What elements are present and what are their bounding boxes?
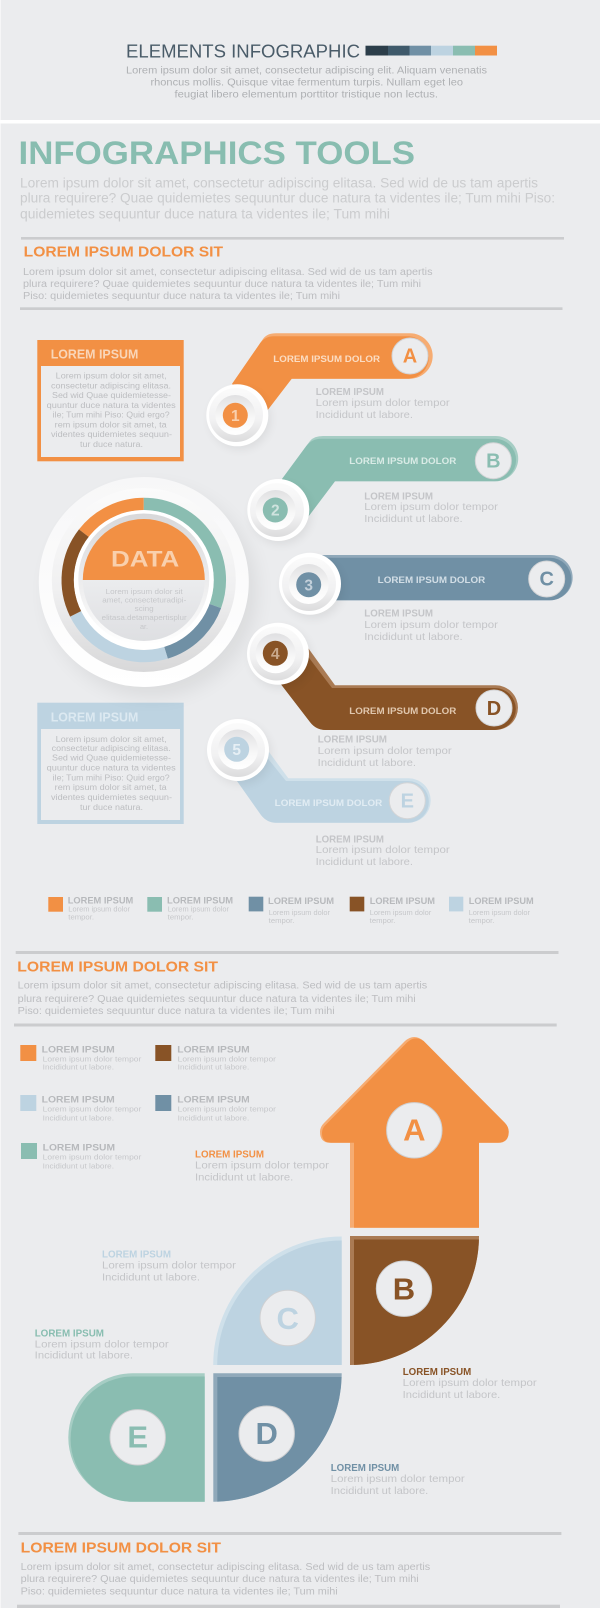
knob 5: 5 xyxy=(232,742,241,759)
callout B text: Lorem ipsum dolor tempor xyxy=(403,1377,537,1389)
blue box text: Sed wid Quae quidemietesse- xyxy=(52,754,171,763)
legend grid item light blue: Incididunt ut labore. xyxy=(43,1113,114,1122)
donut segments xyxy=(68,504,220,656)
legend grid item teal xyxy=(21,1143,142,1170)
callout A text: Lorem ipsum dolor tempor xyxy=(195,1160,330,1172)
section 2 heading block xyxy=(14,951,558,1026)
legend item light blue: Lorem ipsum dolor xyxy=(469,908,530,917)
knob 2 xyxy=(247,479,311,544)
description B xyxy=(364,490,499,525)
legend grid item orange: LOREM IPSUM xyxy=(42,1045,115,1056)
main intro paragraph: Lorem ipsum dolor sit amet, consectetur adipiscing elitasa. Sed wid de us tam apertis xyxy=(20,176,538,191)
badge D xyxy=(476,690,512,726)
description C: Incididunt ut labore. xyxy=(364,631,463,643)
description D: Lorem ipsum dolor tempor xyxy=(318,745,452,757)
callout B text: Incididunt ut labore. xyxy=(403,1389,500,1401)
legend grid item orange: Lorem ipsum dolor tempor xyxy=(43,1055,142,1064)
header title: ELEMENTS INFOGRAPHIC xyxy=(126,40,360,61)
knob 1: 1 xyxy=(231,408,240,425)
legend grid item steel: LOREM IPSUM xyxy=(177,1095,250,1106)
badge A large xyxy=(387,1103,442,1158)
callout E text: Lorem ipsum dolor tempor xyxy=(35,1339,169,1351)
description E: Incididunt ut labore. xyxy=(316,856,413,868)
legend grid item steel: Lorem ipsum dolor tempor xyxy=(178,1105,277,1114)
donut centre lower half xyxy=(83,580,205,641)
legend item orange: LOREM IPSUM xyxy=(68,896,133,907)
footer text: Piso: quidemietes sequuntur duce natura ta videntes ile; Tum mihi xyxy=(21,1587,338,1598)
legend grid item teal: Incididunt ut labore. xyxy=(43,1161,114,1170)
blue box text: tur duce natura. xyxy=(80,803,143,812)
legend grid item light blue: Lorem ipsum dolor tempor xyxy=(43,1105,142,1114)
description A: Incididunt ut labore. xyxy=(316,409,413,421)
band A with knob 1 xyxy=(206,333,433,449)
arrow segment E xyxy=(68,1373,205,1502)
donut centre text: elitasa.detamapertisplur xyxy=(102,613,187,622)
badge E: E xyxy=(401,790,414,812)
legend grid item brown xyxy=(155,1045,277,1072)
arrow segment B xyxy=(350,1236,479,1365)
donut centre text xyxy=(102,587,187,631)
badge D: D xyxy=(487,698,501,720)
blue box text: consectetur adipiscing elitasa. xyxy=(52,744,171,753)
legend grid item steel xyxy=(155,1095,277,1122)
description A: LOREM IPSUM xyxy=(316,386,384,398)
chart: data donut xyxy=(39,477,256,696)
legend item orange: Lorem ipsum dolor xyxy=(68,905,130,914)
legend grid item teal: Lorem ipsum dolor tempor xyxy=(43,1153,142,1162)
badge C: C xyxy=(539,569,554,591)
main title: INFOGRAPHICS TOOLS xyxy=(18,135,415,171)
main intro paragraph xyxy=(20,176,555,221)
legend grid item orange: Incididunt ut labore. xyxy=(43,1063,114,1072)
callout A text: LOREM IPSUM xyxy=(195,1149,264,1161)
section 2 text: Piso: quidemietes sequuntur duce natura ta videntes ile; Tum mihi xyxy=(18,1006,335,1017)
blue box text: rem ipsum dolor sit amet, ta xyxy=(55,783,167,792)
description E: Lorem ipsum dolor tempor xyxy=(316,844,450,856)
callout A text: Incididunt ut labore. xyxy=(195,1172,293,1184)
band D with knob 4 xyxy=(247,623,518,730)
footer block xyxy=(17,1532,561,1608)
knob 4: 4 xyxy=(271,646,280,663)
orange box text: consectetur adipiscing elitasa. xyxy=(51,381,171,390)
description D: LOREM IPSUM xyxy=(318,734,387,746)
legend item light blue: LOREM IPSUM xyxy=(469,896,534,907)
section 1 heading block xyxy=(20,237,564,310)
description E: LOREM IPSUM xyxy=(316,834,384,846)
legend item teal: Lorem ipsum dolor xyxy=(168,905,229,914)
legend item brown: tempor. xyxy=(370,916,395,925)
orange box text: rem ipsum dolor sit amet, ta xyxy=(55,420,167,429)
badge B xyxy=(475,443,511,479)
description C xyxy=(364,608,499,643)
header intro text: rhoncus mollis. Quisque vitae fermentum turpis. Nullam eget leo xyxy=(150,77,463,88)
description D: Incididunt ut labore. xyxy=(318,757,416,769)
badge D large: D xyxy=(256,1416,278,1451)
legend item steel: tempor. xyxy=(269,916,294,925)
legend grid xyxy=(20,1045,277,1170)
donut centre text: Lorem ipsum dolor sit xyxy=(106,587,183,596)
legend grid item orange xyxy=(20,1045,142,1072)
callout D text: Incididunt ut labore. xyxy=(331,1485,428,1497)
orange box text: ile; Tum mihi Piso: Quid ergo? xyxy=(53,411,170,420)
description A: Lorem ipsum dolor tempor xyxy=(316,397,450,409)
section 2 text xyxy=(18,981,427,1017)
callout E text xyxy=(35,1328,169,1362)
donut centre text: scing xyxy=(135,604,154,613)
orange box text xyxy=(47,372,176,449)
legend row xyxy=(48,896,534,925)
header intro text: feugiat libero elementum porttitor tristique non lectus. xyxy=(174,89,438,100)
section 1 text: plura requirere? Quae quidemietes sequuntur duce natura ta videntes ile; Tum mihi xyxy=(23,279,421,290)
palette bar xyxy=(366,46,497,56)
donut centre text: amet, consecteturadipi- xyxy=(102,595,187,604)
section 1 heading: LOREM IPSUM DOLOR SIT xyxy=(24,245,223,261)
legend item brown: LOREM IPSUM xyxy=(370,896,435,907)
donut centre orange half xyxy=(83,519,205,580)
band B label: LOREM IPSUM DOLOR xyxy=(349,456,456,467)
band E with knob 5 xyxy=(207,719,431,823)
description E xyxy=(316,834,450,868)
description C: Lorem ipsum dolor tempor xyxy=(364,619,499,631)
DATA label: DATA xyxy=(111,547,179,572)
description C: LOREM IPSUM xyxy=(364,608,433,620)
description B: Lorem ipsum dolor tempor xyxy=(364,501,499,513)
knob 3 xyxy=(279,553,343,618)
callout C text: LOREM IPSUM xyxy=(102,1249,171,1261)
badge A: A xyxy=(403,346,417,368)
badge C large: C xyxy=(277,1301,299,1336)
description B: LOREM IPSUM xyxy=(364,490,433,502)
knob 5 xyxy=(207,719,271,784)
knob 1 xyxy=(206,384,270,449)
header intro text xyxy=(126,65,487,100)
callout B text: LOREM IPSUM xyxy=(403,1366,472,1378)
badge E xyxy=(389,783,425,819)
footer text: Lorem ipsum dolor sit amet, consectetur adipiscing elitasa. Sed wid de us tam apertis xyxy=(21,1562,430,1573)
header intro text: Lorem ipsum dolor sit amet, consectetur adipiscing elit. Aliquam venenatis xyxy=(126,65,487,76)
callout B text xyxy=(403,1366,537,1401)
donut centre text: ar. xyxy=(140,622,148,631)
blue box text: ile; Tum mihi Piso: Quid ergo? xyxy=(53,774,170,783)
arrow segment A xyxy=(320,1037,509,1228)
callout A text xyxy=(195,1149,330,1184)
legend item teal xyxy=(147,896,233,922)
blue box text: quuntur duce natura ta videntes xyxy=(47,764,176,773)
knob 4 xyxy=(247,623,311,688)
legend grid item brown: Incididunt ut labore. xyxy=(178,1063,249,1072)
legend item brown: Lorem ipsum dolor xyxy=(370,908,432,917)
knob 3: 3 xyxy=(304,577,313,594)
legend grid item light blue xyxy=(20,1095,142,1122)
orange box title: LOREM IPSUM xyxy=(51,347,138,361)
main intro paragraph: plura requirere? Quae quidemietes sequuntur duce natura ta videntes ile; Tum mihi Piso: xyxy=(20,191,555,206)
blue box text: videntes quidemietes sequun- xyxy=(51,793,172,802)
blue box text: Lorem ipsum dolor sit amet, xyxy=(56,735,167,744)
badge B: B xyxy=(486,451,501,473)
legend grid item brown: LOREM IPSUM xyxy=(177,1045,250,1056)
legend item light blue xyxy=(449,896,534,925)
section 1 text: Lorem ipsum dolor sit amet, consectetur adipiscing elitasa. Sed wid de us tam apertis xyxy=(23,267,432,278)
callout C text xyxy=(102,1249,237,1284)
legend item steel: LOREM IPSUM xyxy=(268,896,334,907)
knob 2: 2 xyxy=(271,503,280,520)
legend item steel: Lorem ipsum dolor xyxy=(269,908,330,917)
footer heading: LOREM IPSUM DOLOR SIT xyxy=(21,1541,221,1557)
badge E large: E xyxy=(127,1420,148,1455)
arrow segment D xyxy=(213,1373,342,1502)
callout E text: Incididunt ut labore. xyxy=(35,1350,133,1362)
panel: orange text box xyxy=(37,340,184,461)
band C label: LOREM IPSUM DOLOR xyxy=(378,575,485,586)
legend grid item brown: Lorem ipsum dolor tempor xyxy=(178,1055,277,1064)
arrow segment C xyxy=(213,1236,342,1365)
section 2 heading: LOREM IPSUM DOLOR SIT xyxy=(17,960,218,976)
main intro paragraph: quidemietes sequuntur duce natura ta videntes ile; Tum mihi xyxy=(20,206,390,221)
badge A large: A xyxy=(403,1113,425,1148)
blue box text xyxy=(47,735,176,812)
description A xyxy=(316,386,450,421)
band C with knob 3 xyxy=(279,553,573,618)
description B: Incididunt ut labore. xyxy=(364,513,463,525)
description D xyxy=(318,734,452,769)
orange box text: Sed wid Quae quidemietesse- xyxy=(52,391,171,400)
legend item steel xyxy=(249,896,334,925)
callout D text xyxy=(331,1462,465,1497)
section 1 text: Piso: quidemietes sequuntur duce natura ta videntes ile; Tum mihi xyxy=(23,291,340,302)
callout D text: Lorem ipsum dolor tempor xyxy=(331,1473,465,1485)
legend item brown xyxy=(350,896,435,925)
footer text xyxy=(21,1562,430,1598)
legend item teal: tempor. xyxy=(168,913,193,922)
callout C text: Lorem ipsum dolor tempor xyxy=(102,1260,237,1272)
band E label: LOREM IPSUM DOLOR xyxy=(275,798,382,809)
orange box text: quuntur duce natura ta videntes xyxy=(47,401,176,410)
orange box text: videntes quidemietes sequun- xyxy=(51,430,172,439)
legend grid item steel: Incididunt ut labore. xyxy=(178,1113,249,1122)
blue box title: LOREM IPSUM xyxy=(51,710,138,724)
legend grid item light blue: LOREM IPSUM xyxy=(42,1095,115,1106)
section 2 text: Lorem ipsum dolor sit amet, consectetur adipiscing elitasa. Sed wid de us tam apertis xyxy=(18,981,427,992)
legend item orange xyxy=(48,896,133,922)
callout C text: Incididunt ut labore. xyxy=(102,1272,200,1284)
badge C xyxy=(529,561,565,597)
footer text: plura requirere? Quae quidemietes sequuntur duce natura ta videntes ile; Tum mihi xyxy=(21,1574,419,1585)
badge A xyxy=(392,338,428,374)
legend item teal: LOREM IPSUM xyxy=(167,896,233,907)
callout E text: LOREM IPSUM xyxy=(35,1328,104,1340)
orange box text: tur duce natura. xyxy=(80,440,143,449)
legend item orange: tempor. xyxy=(68,913,94,922)
orange box text: Lorem ipsum dolor sit amet, xyxy=(56,372,167,381)
band A label: LOREM IPSUM DOLOR xyxy=(273,354,380,365)
callout D text: LOREM IPSUM xyxy=(331,1462,400,1474)
panel: light blue text box xyxy=(37,703,184,824)
header block xyxy=(126,40,497,100)
band B with knob 2 xyxy=(247,436,518,544)
section 2 text: plura requirere? Quae quidemietes sequuntur duce natura ta videntes ile; Tum mihi xyxy=(18,994,416,1005)
badge B large: B xyxy=(393,1271,415,1306)
section 1 text xyxy=(23,267,432,302)
legend item light blue: tempor. xyxy=(469,916,494,925)
band D label: LOREM IPSUM DOLOR xyxy=(349,706,456,717)
legend grid item teal: LOREM IPSUM xyxy=(43,1143,115,1154)
